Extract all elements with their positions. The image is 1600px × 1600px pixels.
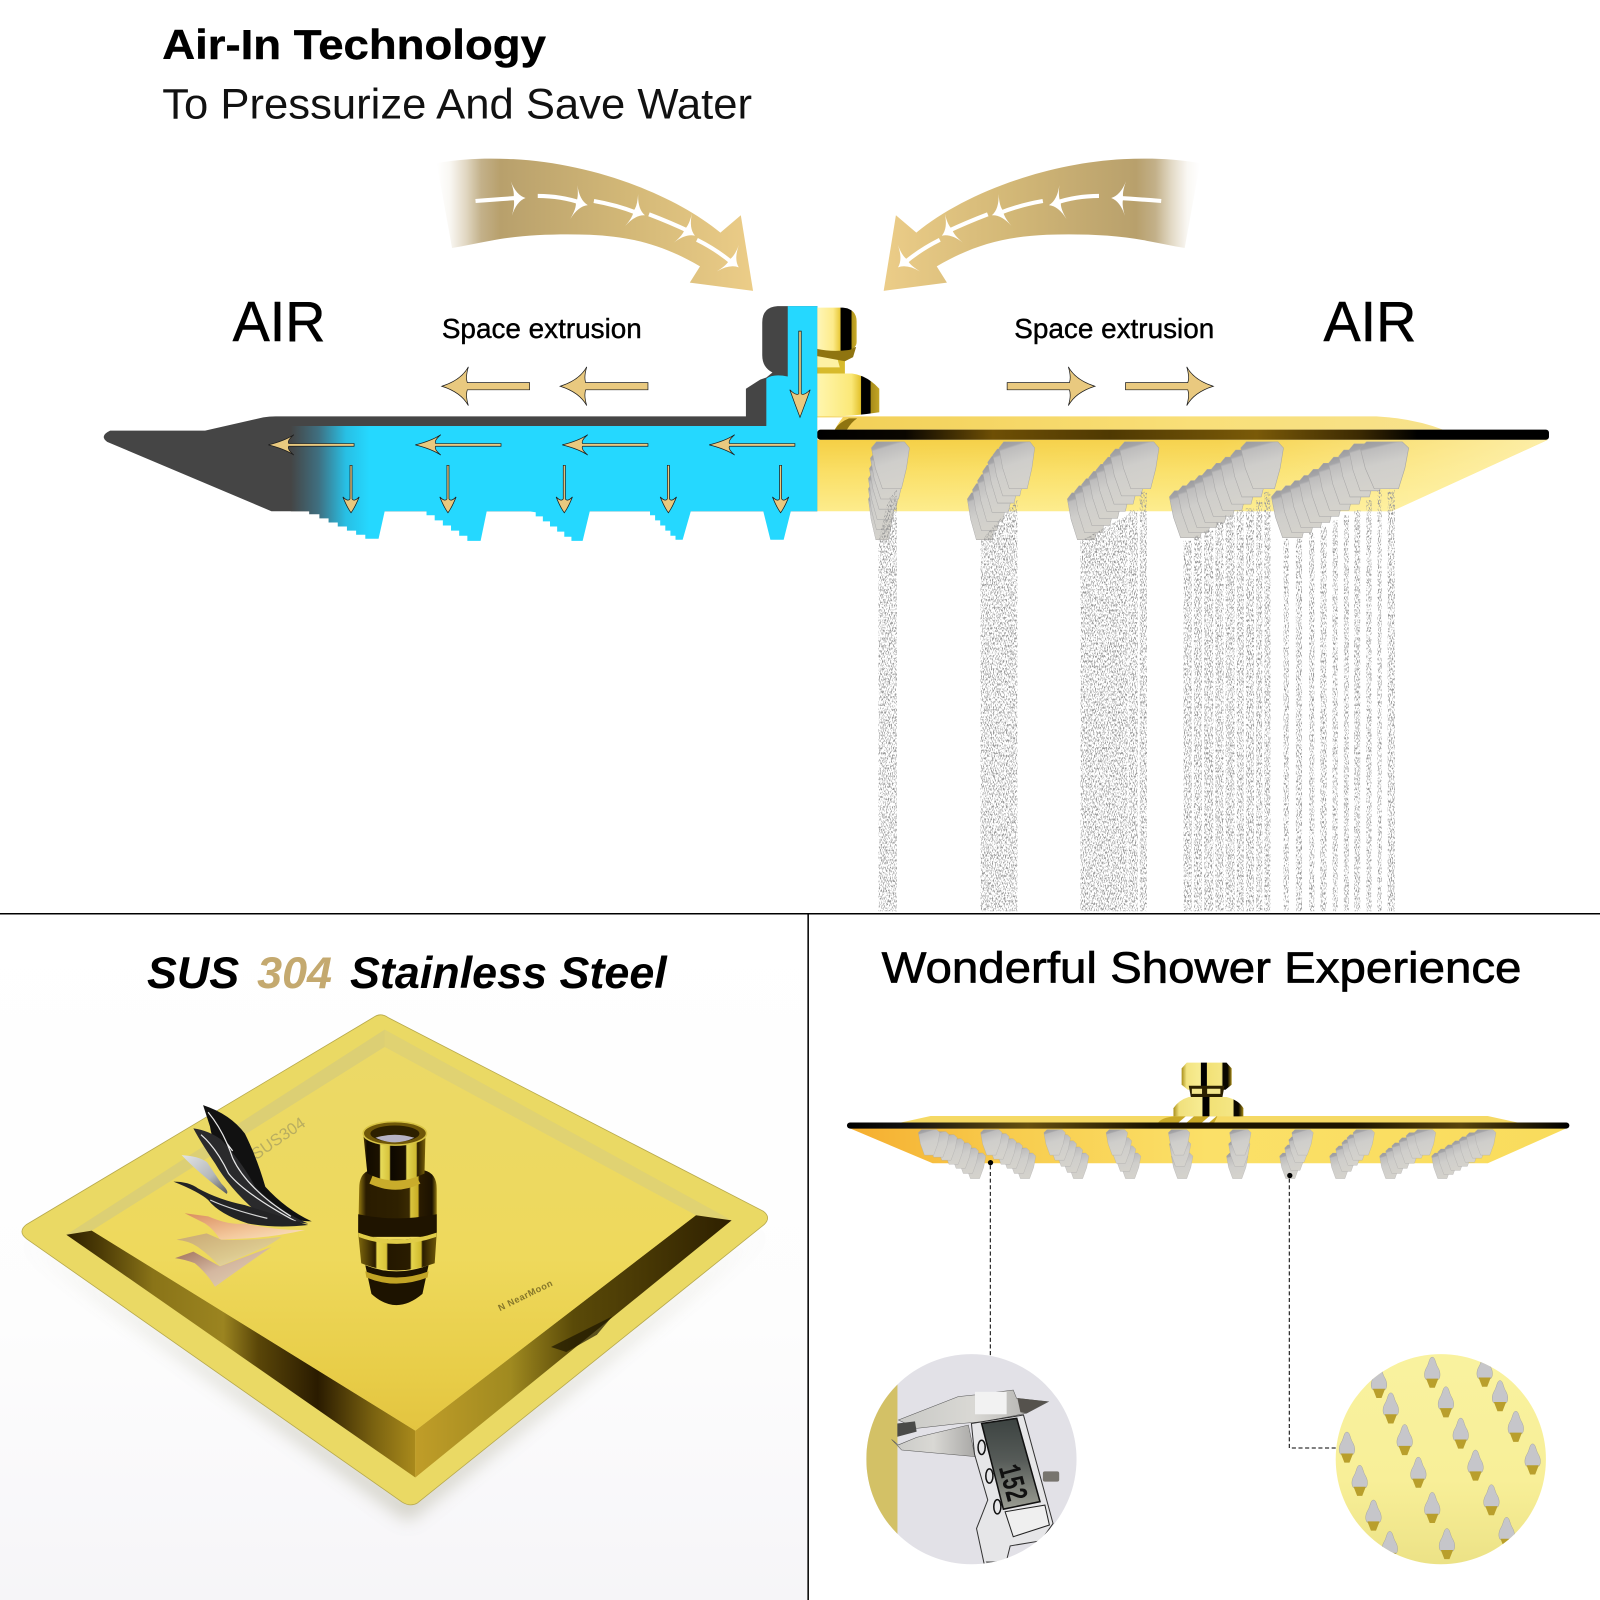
flow arrows: downward — [343, 331, 810, 513]
panel background — [0, 915, 807, 1600]
detail circle: caliper: 152 — [989, 1461, 1032, 1506]
heading: SUS 304: SUS — [147, 947, 239, 998]
label: space extrusion right: Space extrusion — [1014, 313, 1214, 344]
nozzles: front view — [918, 1130, 1496, 1179]
detail circle: silicone nozzles — [1336, 1354, 1546, 1564]
panel: wonderful shower experience — [847, 944, 1569, 1571]
panel dividers — [0, 914, 1600, 1600]
curved air arrow: right — [884, 159, 1200, 291]
label: AIR left: AIR — [233, 290, 326, 353]
detail circle: caliper — [866, 1354, 1077, 1571]
title — [162, 21, 752, 128]
foil layers — [173, 1105, 312, 1287]
arrows: extrusion right — [1007, 367, 1213, 406]
label: AIR right: AIR — [1323, 290, 1416, 353]
shower head: right half gold body — [817, 308, 1549, 511]
curved air arrow: left — [437, 159, 753, 291]
cross-section: left half with water flow — [104, 306, 817, 541]
engraved NearMoon: N NearMoon — [496, 1278, 554, 1313]
engraved SUS304: SUS304 — [248, 1114, 309, 1164]
plate shadow — [21, 1230, 767, 1520]
shower head: front view — [847, 1063, 1569, 1163]
title: To Pressurize And Save Water — [162, 80, 752, 128]
panel: SUS 304 stainless steel — [0, 915, 807, 1600]
threaded fitting — [358, 1122, 437, 1305]
flow arrows: horizontal — [268, 435, 795, 455]
heading: SUS 304: Stainless Steel — [350, 947, 668, 998]
arrows: extrusion left — [442, 367, 648, 406]
callout leaders — [988, 1160, 1337, 1448]
label: space extrusion left: Space extrusion — [442, 313, 642, 344]
rain streams — [879, 490, 1395, 911]
gold square plate — [22, 1015, 768, 1505]
heading: wonderful shower: Wonderful Shower Experience — [882, 944, 1521, 993]
heading: SUS 304: 304 — [257, 947, 332, 998]
nozzles: right half — [868, 442, 1409, 540]
title: Air-In Technology — [162, 21, 547, 68]
